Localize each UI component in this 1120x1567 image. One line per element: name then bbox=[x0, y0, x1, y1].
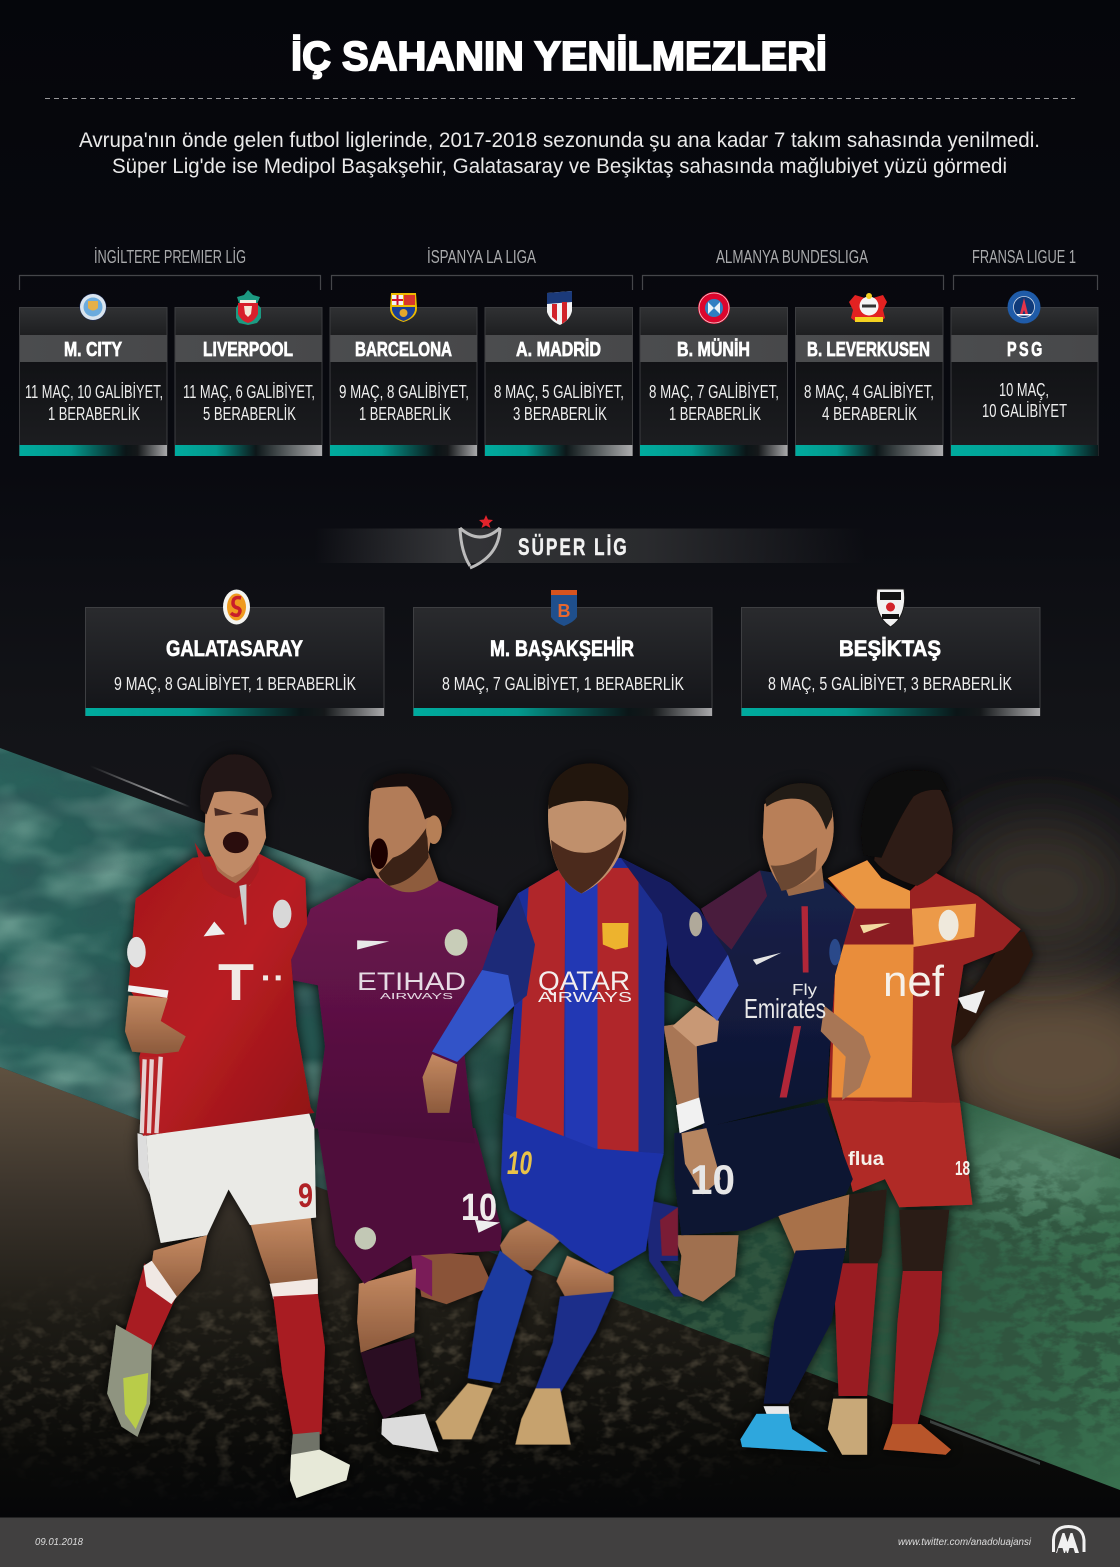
icon: Başakşehir crest bbox=[551, 590, 577, 626]
player: red shirt 9 bbox=[107, 754, 350, 1498]
panel: B. Münih: 1 BERABERLİK bbox=[669, 403, 761, 424]
player: maroon shirt 10: 10 bbox=[461, 1187, 497, 1229]
player: blaugrana shirt 10 bbox=[423, 763, 739, 1444]
league headings: İSPANYA LA LIGA bbox=[427, 247, 536, 267]
league headings bbox=[94, 247, 1076, 267]
panel: A. Madrid: 8 MAÇ, 5 GALİBİYET, bbox=[494, 381, 624, 402]
intro text: Süper Lig'de ise Medipol Başakşehir, Galatasaray ve Beşiktaş sahasında mağlubiyet yüzü görmedi bbox=[112, 155, 1007, 178]
player: navy shirt 10: Emirates bbox=[744, 993, 826, 1024]
intro text bbox=[79, 129, 1040, 178]
player: orange-red shirt: 18 bbox=[955, 1158, 970, 1180]
panel: PSG: 10 MAÇ, bbox=[999, 379, 1049, 400]
panel: B. Leverkusen: 4 BERABERLİK bbox=[822, 403, 917, 424]
icon: Leverkusen crest bbox=[849, 293, 887, 322]
panel: Beşiktaş bbox=[742, 608, 1040, 716]
panel: M. Başakşehir bbox=[414, 608, 712, 716]
panel: Liverpool: LIVERPOOL bbox=[203, 339, 293, 361]
players bbox=[107, 754, 1033, 1498]
panel: B. Leverkusen: B. LEVERKUSEN bbox=[807, 339, 930, 361]
player: navy shirt 10: Fly bbox=[792, 982, 817, 999]
panel: Barcelona: 1 BERABERLİK bbox=[359, 403, 451, 424]
icon: Bayern crest bbox=[698, 292, 730, 324]
panel: Beşiktaş: 8 MAÇ, 5 GALİBİYET, 3 BERABERLİK bbox=[768, 673, 1012, 694]
panel: Galatasaray: 9 MAÇ, 8 GALİBİYET, 1 BERABERLİK bbox=[114, 673, 356, 694]
intro text: Avrupa'nın önde gelen futbol liglerinde, 2017-2018 sezonunda şu ana kadar 7 takım sahasında yenilmedi. bbox=[79, 129, 1040, 152]
footer bar: 09.01.2018 bbox=[35, 1537, 83, 1548]
player: orange-red shirt: nef bbox=[883, 957, 945, 1006]
player: navy shirt 10 bbox=[664, 783, 871, 1452]
player: maroon shirt 10: ETIHAD bbox=[357, 968, 466, 996]
footer bar bbox=[0, 1518, 1120, 1567]
player: orange-red shirt: flua bbox=[848, 1149, 884, 1170]
panel: M. City: M. CITY bbox=[64, 339, 123, 361]
player: navy shirt 10: 10 bbox=[690, 1156, 735, 1203]
panel: M. City: 1 BERABERLİK bbox=[48, 403, 140, 424]
footer bar: www.twitter.com/anadoluajansi bbox=[898, 1537, 1032, 1548]
panel: Liverpool bbox=[175, 308, 322, 456]
panel: Beşiktaş: BEŞİKTAŞ bbox=[839, 636, 941, 661]
panel: B. Leverkusen: 8 MAÇ, 4 GALİBİYET, bbox=[804, 381, 934, 402]
panel: PSG: PSG bbox=[1007, 338, 1042, 361]
panel: Liverpool: 5 BERABERLİK bbox=[203, 403, 296, 424]
player: red shirt 9: T bbox=[218, 954, 254, 1012]
panel: M. Başakşehir: M. BAŞAKŞEHİR bbox=[490, 636, 634, 661]
panel: PSG: 10 GALİBİYET bbox=[982, 400, 1067, 421]
player: blaugrana shirt 10: 10 bbox=[507, 1145, 532, 1181]
panel: M. City: 11 MAÇ, 10 GALİBİYET, bbox=[25, 381, 163, 402]
panel: B. Münih: 8 MAÇ, 7 GALİBİYET, bbox=[649, 381, 779, 402]
panel: M. Başakşehir: 8 MAÇ, 7 GALİBİYET, 1 BERABERLİK bbox=[442, 673, 684, 694]
heading: Süper Lig bbox=[315, 515, 865, 568]
panel: M. City bbox=[20, 308, 167, 456]
panel: A. Madrid bbox=[485, 308, 632, 456]
panel: A. Madrid: 3 BERABERLİK bbox=[513, 403, 607, 424]
panel: Liverpool: 11 MAÇ, 6 GALİBİYET, bbox=[183, 381, 315, 402]
league headings: ALMANYA BUNDESLIGA bbox=[716, 247, 868, 267]
icon: Atletico Madrid crest bbox=[547, 291, 572, 325]
icon: Beşiktaş crest bbox=[876, 589, 905, 627]
panel: Barcelona: 9 MAÇ, 8 GALİBİYET, bbox=[339, 381, 469, 402]
heading: Süper Lig: SÜPER LİG bbox=[518, 534, 627, 561]
player: maroon shirt 10 bbox=[291, 773, 502, 1452]
player: blaugrana shirt 10: QATAR bbox=[538, 966, 630, 996]
player: red shirt 9: ▪ ▪ bbox=[262, 967, 282, 989]
icon: Anadolu Agency logo bbox=[1052, 1525, 1086, 1553]
background bbox=[0, 538, 1120, 1494]
panel: B. Leverkusen bbox=[796, 308, 943, 456]
player: orange-red shirt bbox=[828, 770, 1033, 1455]
player: red shirt 9: 9 bbox=[298, 1177, 313, 1215]
icon: Galatasaray crest bbox=[223, 590, 250, 624]
panel: Galatasaray: GALATASARAY bbox=[166, 636, 303, 661]
icon: Barcelona crest bbox=[390, 293, 417, 322]
icon: Manchester City crest bbox=[80, 294, 106, 320]
panel: Barcelona bbox=[330, 308, 477, 456]
title: İÇ SAHANIN YENİLMEZLERİ bbox=[291, 33, 827, 79]
player: blaugrana shirt 10: AIRWAYS bbox=[538, 989, 632, 1006]
panel: B. Münih: B. MÜNİH bbox=[677, 338, 750, 361]
icon: PSG crest bbox=[1008, 290, 1040, 324]
panel: B. Münih bbox=[640, 308, 788, 456]
player: maroon shirt 10: AIRWAYS bbox=[380, 992, 453, 1001]
panel: A. Madrid: A. MADRİD bbox=[516, 338, 601, 361]
icon: Liverpool crest bbox=[236, 290, 261, 325]
panel: Barcelona: BARCELONA bbox=[355, 339, 452, 361]
panel: PSG bbox=[951, 308, 1098, 456]
icon: Başakşehir crest: B bbox=[558, 601, 570, 621]
league headings: İNGİLTERE PREMIER LİG bbox=[94, 247, 246, 267]
league headings: FRANSA LIGUE 1 bbox=[972, 247, 1076, 267]
panel: Galatasaray bbox=[86, 608, 384, 716]
